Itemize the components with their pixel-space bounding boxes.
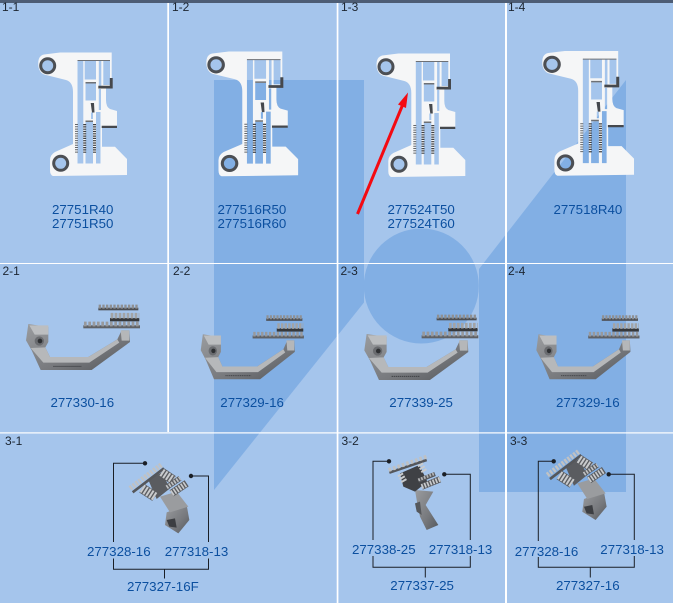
part numbers 3-3: 277327-16 (556, 578, 620, 593)
panel 2-1: 2-1 (2, 264, 20, 278)
part numbers 1-3: 277524T60 (388, 216, 455, 231)
callout brackets 3-1 (114, 461, 208, 578)
part numbers 3-3: 277328-16 (515, 544, 578, 559)
panel 1-1 (2, 0, 127, 231)
panel 1-4: 1-4 (508, 0, 526, 14)
panel 1-3 (341, 0, 465, 231)
part number 2-2: 277329-16 (220, 395, 284, 410)
panel 3-2 (342, 434, 492, 593)
callout brackets 3-2 (373, 459, 470, 578)
feed dog 3-3 (547, 451, 607, 520)
part numbers 1-2: 277516R60 (218, 216, 286, 231)
part numbers 1-1: 27751R50 (52, 216, 113, 231)
panel 2-2 (173, 264, 304, 410)
panel 3-3 (510, 434, 664, 593)
part numbers 1-1 (52, 202, 113, 231)
top edge strip (0, 0, 673, 3)
red arrow (358, 92, 408, 214)
part numbers 3-3 (515, 542, 664, 593)
part numbers 3-1: 277318-13 (165, 544, 228, 559)
panel 1-2 (172, 0, 298, 231)
needle plate 1-2 (206, 52, 298, 176)
part number 1-4: 277518R40 (554, 202, 622, 217)
feed dog 2-2 (201, 317, 304, 379)
needle plate 1-3 (377, 54, 465, 177)
part numbers 1-2: 277516R50 (218, 202, 286, 217)
panel 2-4: 2-4 (508, 264, 526, 278)
feed dog 3-1 (130, 464, 189, 533)
feed dog 2-3 (364, 317, 478, 380)
panel 1-4 (508, 0, 634, 217)
part numbers 3-2 (352, 542, 492, 593)
panel 2-3 (340, 264, 478, 410)
panel 1-1: 1-1 (2, 0, 20, 14)
needle plate 1-1 (38, 52, 127, 176)
part numbers 3-1: 277327-16F (127, 579, 199, 594)
panel 2-4 (508, 264, 639, 410)
part numbers 3-2: 277318-13 (429, 542, 492, 557)
panel 2-1 (2, 264, 140, 410)
panel 1-2: 1-2 (172, 0, 190, 14)
part numbers 1-1: 27751R40 (52, 202, 113, 217)
panel 2-3: 2-3 (340, 264, 358, 278)
part number 2-1: 277330-16 (50, 395, 114, 410)
panel 3-1 (5, 434, 228, 594)
panel 3-1: 3-1 (5, 434, 23, 448)
part numbers 1-3: 277524T50 (388, 202, 455, 217)
part numbers 3-3: 277318-13 (600, 542, 664, 557)
panel 2-2: 2-2 (173, 264, 191, 278)
part number 2-4: 277329-16 (556, 395, 620, 410)
panel 3-2: 3-2 (342, 434, 359, 448)
background logo shape (214, 80, 626, 492)
callout brackets 3-3 (538, 459, 634, 578)
panel 3-3: 3-3 (510, 434, 528, 448)
feed dog 2-1 (26, 307, 140, 370)
part numbers 3-1 (87, 544, 228, 594)
panel 1-3: 1-3 (341, 0, 359, 14)
part numbers 1-3 (388, 202, 455, 231)
part numbers 1-2 (218, 202, 286, 231)
part numbers 3-2: 277338-25 (352, 542, 416, 557)
feed dog 3-2 (389, 457, 440, 530)
needle plate 1-4 (542, 51, 634, 176)
part numbers 3-1: 277328-16 (87, 544, 151, 559)
feed dog 2-4 (536, 317, 639, 379)
part numbers 3-2: 277337-25 (390, 578, 454, 593)
part number 2-3: 277339-25 (389, 395, 453, 410)
